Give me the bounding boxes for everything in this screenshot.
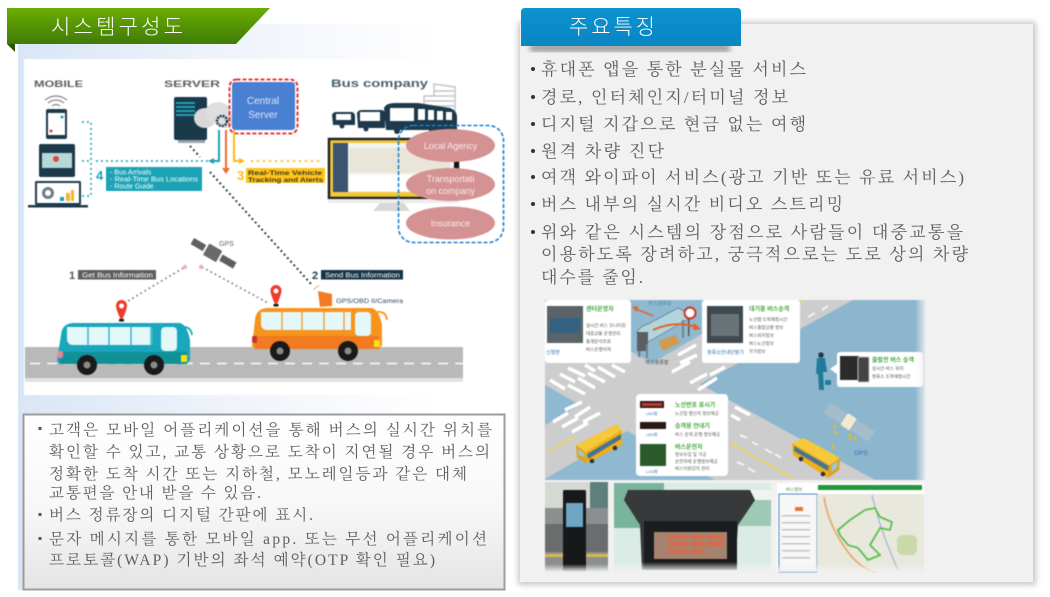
icon: GPS/OBD device bbox=[314, 286, 403, 307]
feature list: 원격 차량 진단 bbox=[541, 141, 665, 161]
ellipse: Insurance: Insurance bbox=[431, 218, 470, 228]
callout: step 3: Real-Time Vehicle bbox=[248, 170, 322, 177]
feature list: 여객 와이파이 서비스(광고 기반 또는 유료 서비스) bbox=[541, 167, 964, 187]
location pin on orange bus bbox=[270, 285, 282, 306]
server group: SERVER bbox=[164, 79, 220, 90]
feature list bbox=[531, 59, 969, 287]
GPS satellite bbox=[189, 235, 238, 271]
card: center operator: 대중교통 운영관리 bbox=[586, 330, 620, 337]
heading tab: key features bbox=[521, 8, 741, 46]
label: step 1: Get Bus Information bbox=[82, 272, 153, 279]
heading banner: system configuration bbox=[7, 8, 270, 52]
card: center operator bbox=[545, 300, 631, 363]
dotted GPS signal links bbox=[128, 265, 268, 303]
card: pre-departure passengers: 출발전 버스 승객 bbox=[872, 356, 914, 364]
feature list: 위와 같은 시스템의 장점으로 사람들이 대중교통을 bbox=[541, 222, 964, 242]
card: waiting passengers: 버스위치정보 bbox=[749, 332, 774, 339]
arrows from central server bbox=[208, 130, 320, 174]
photo: bus information display bbox=[614, 483, 771, 572]
callout: step 4: - Real-Time Bus Locations bbox=[110, 176, 199, 184]
text box: passenger services: 고객은 모바일 어플리케이션을 통해 버스의 실시간 위치를 bbox=[49, 420, 492, 439]
callout: step 4: 4 bbox=[96, 168, 104, 183]
card: waiting passengers: 대기중 버스승객 bbox=[749, 305, 789, 313]
satellite illustration: GPS bbox=[854, 450, 869, 457]
label: step 1: 1 bbox=[69, 270, 75, 282]
yellow bus right bbox=[792, 438, 840, 478]
card: pre-departure passengers: 정류소 도착예정시간 bbox=[872, 373, 911, 380]
feature list: 디지털 지갑으로 현금 없는 여행 bbox=[541, 114, 806, 134]
location pin on teal bus bbox=[116, 300, 127, 322]
card: waiting passengers: 노선별 도착예정시간 bbox=[749, 316, 788, 323]
card: center operator: 센터운영자 bbox=[586, 305, 614, 313]
teal bus bbox=[57, 323, 192, 375]
callout: step 3: 3 bbox=[237, 168, 244, 183]
text box: passenger services: 문자 메시지를 통한 모바일 app. 또는 무선 어플리케이션 bbox=[49, 529, 487, 548]
label: step 2: Send Bus Information bbox=[325, 272, 400, 279]
card: on-board bus displays: 노선번호 표시기 bbox=[675, 401, 715, 409]
screenshot: bus route map: 버스정보 bbox=[786, 486, 803, 493]
card: waiting passengers: 버스출발상황 정보 bbox=[749, 324, 783, 331]
satellite illustration bbox=[823, 402, 875, 457]
card: on-board bus displays: 정보수집 및 가공 bbox=[675, 451, 706, 458]
heading banner: system configuration: 시스템구성도 bbox=[51, 16, 183, 39]
card: on-board bus displays: 버스 승객 운행 정보제공 bbox=[675, 431, 720, 438]
feature list: 이용하도록 장려하고, 궁극적으로는 도로 상의 차량 bbox=[541, 244, 969, 264]
card: on-board bus displays: 버스미원감지 관리 bbox=[675, 465, 709, 472]
text box: passenger services: 버스 정류장의 디지털 간판에 표시. bbox=[49, 505, 313, 524]
bus company group: Bus company bbox=[331, 78, 429, 90]
text box: passenger services: 교통편을 안내 받을 수 있음. bbox=[49, 483, 261, 502]
bus shelter: 버스정류장 bbox=[648, 300, 672, 307]
dotted data links bbox=[190, 146, 312, 285]
callout: step 3: Tracking and Alerts bbox=[248, 177, 323, 184]
ellipse: Insurance bbox=[406, 206, 495, 240]
GPS satellite: GPS bbox=[219, 241, 234, 248]
text box: passenger services: 정확한 도착 시간 또는 지하철, 모노레일등과 같은 대체 bbox=[49, 464, 467, 483]
central server box: Server bbox=[248, 110, 278, 121]
heading tab: key features: 주요특징 bbox=[569, 16, 655, 39]
card: center operator: 신형판 bbox=[546, 349, 560, 356]
person with phone bbox=[816, 352, 831, 390]
card: waiting passengers: 부가정보 bbox=[749, 348, 766, 355]
mobile group bbox=[28, 79, 88, 208]
illustration: smart bus stop intersection bbox=[545, 300, 927, 480]
yellow bus left bbox=[576, 424, 622, 463]
card: waiting passengers: 정류소안내단말기 bbox=[707, 349, 744, 356]
dotted link: mobile to server bbox=[82, 122, 208, 196]
callout: step 4 bbox=[96, 167, 202, 191]
card: waiting passengers bbox=[702, 300, 800, 363]
ellipse: Transportation company: on company bbox=[426, 186, 476, 196]
panel: system architecture diagram bbox=[24, 59, 504, 395]
text box: passenger services: 확인할 수 있고, 교통 상황으로 도착이 지연될 경우 버스의 bbox=[49, 442, 490, 461]
callout: step 3 bbox=[237, 168, 325, 184]
feature list: 휴대폰 앱을 통한 분실물 서비스 bbox=[541, 59, 807, 79]
callout: step 4: - Route Guide bbox=[110, 184, 154, 190]
feature list: 경로, 인터체인지/터미널 정보 bbox=[541, 87, 789, 107]
ellipse: Transportation company: Transportati bbox=[427, 174, 474, 184]
card: center operator: 버스운행이력 bbox=[586, 346, 611, 353]
feature list: 대수를 줄임. bbox=[541, 268, 643, 287]
photo: bus stop kiosk bbox=[545, 482, 608, 572]
card: on-board bus displays: LCD형 bbox=[646, 468, 658, 474]
card: center operator: 통계분석조회 bbox=[586, 338, 611, 345]
feature list: 버스 내부의 실시간 비디오 스트리밍 bbox=[541, 194, 843, 214]
server group bbox=[164, 79, 234, 143]
orange bus bbox=[252, 308, 387, 361]
road bbox=[25, 347, 463, 382]
card: on-board bus displays: LED형 bbox=[646, 431, 658, 437]
card: waiting passengers: 버스노선정보 bbox=[749, 340, 774, 347]
icon: GPS/OBD device: GPS/OBD II/Camera bbox=[336, 298, 403, 305]
card: on-board bus displays: LED형 bbox=[646, 410, 658, 416]
card: on-board bus displays: 노선및 행선지 정보제공 bbox=[675, 410, 719, 417]
central server box: Central bbox=[247, 96, 279, 107]
ellipse: Transportation company bbox=[406, 168, 495, 201]
bus shelter: 버스정류장 bbox=[645, 359, 669, 366]
central server box bbox=[230, 80, 298, 134]
card: on-board bus displays: 운전자에 운행정보제공 bbox=[675, 458, 718, 465]
card: center operator: 실시간 버스 모니터링 bbox=[586, 322, 626, 329]
bus shelter bbox=[632, 300, 701, 366]
callout: step 4: - Bus Arrivals bbox=[110, 170, 152, 176]
text box: passenger services bbox=[24, 414, 504, 590]
panel: system diagram background bbox=[18, 24, 513, 590]
screenshot: bus route map bbox=[777, 483, 924, 572]
card: pre-departure passengers bbox=[830, 352, 923, 387]
label: step 2 bbox=[312, 270, 403, 282]
bus company group bbox=[328, 78, 459, 211]
ellipse: Local Agency bbox=[406, 129, 495, 162]
label: step 2: 2 bbox=[312, 270, 318, 282]
panel: key features bbox=[518, 8, 1036, 585]
dashed group outline bbox=[398, 126, 504, 242]
ellipse: Local Agency: Local Agency bbox=[424, 141, 478, 151]
card: on-board bus displays bbox=[636, 394, 728, 476]
label: step 1 bbox=[69, 270, 156, 282]
card: on-board bus displays: 승객용 안내기 bbox=[675, 422, 710, 430]
mobile group: MOBILE bbox=[34, 79, 83, 90]
card: on-board bus displays: 버스운전자 bbox=[675, 443, 703, 451]
card: pre-departure passengers: 실시간 버스 위치 bbox=[872, 365, 903, 372]
text box: passenger services: 프로토콜(WAP) 기반의 좌석 예약(OTP 확인 필요) bbox=[49, 550, 435, 569]
